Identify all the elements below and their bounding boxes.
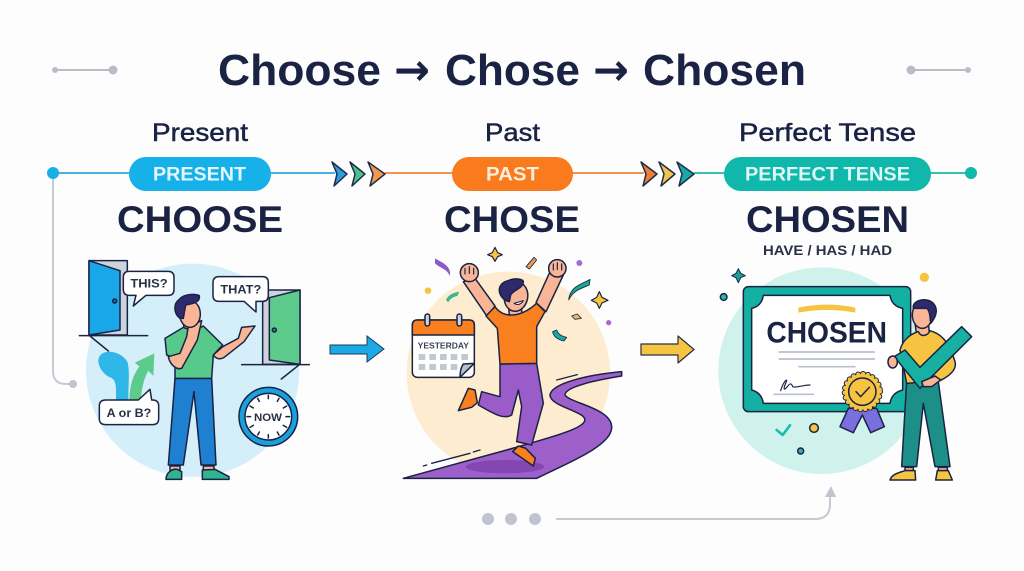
heading: Present: Present [152,119,248,147]
title [218,45,806,96]
panel: past illustration [403,247,622,478]
confetti and sparkles [425,247,611,341]
winding road [403,372,622,478]
callout: THIS?: THIS? [130,277,168,291]
timeline [47,167,977,179]
pill: PRESENT: PRESENT [153,164,246,186]
figure: thinking man [165,294,255,479]
background circle [86,264,299,477]
arrow: yellow [641,336,694,363]
icon: NOW clock [239,387,298,446]
figure: man with checkmark [888,300,972,480]
certificate: CHOSEN [766,317,887,350]
heading: Perfect Tense: Perfect Tense [739,119,916,147]
pill: PAST [452,157,573,191]
background circle [718,267,925,474]
connector: left elbow line [53,178,77,388]
background circle [407,272,610,475]
decoration: top right connector [906,66,971,74]
word: CHOSE: CHOSE [444,199,580,240]
decoration: top left connector [52,66,118,74]
panel: present illustration [79,261,309,479]
icon: right door [242,290,309,379]
connector: bottom dots and arrow [482,486,836,525]
icon: calendar YESTERDAY: YESTERDAY [418,340,469,350]
panel: perfect tense illustration [718,267,972,480]
pill: PERFECT TENSE: PERFECT TENSE [745,164,910,186]
pill: PAST: PAST [486,164,539,186]
icon: calendar YESTERDAY [412,314,474,377]
word: CHOOSE: CHOOSE [117,199,283,240]
certificate [743,287,911,412]
pill: PERFECT TENSE [724,157,931,191]
title: → [394,45,430,96]
title: Chose [445,46,580,95]
callout: THAT? [213,277,268,312]
title: → [593,45,629,96]
icon: award seal [840,374,884,433]
pill: PRESENT [129,157,271,191]
chevrons: past to perfect [641,162,694,186]
callout: A or B? [99,389,159,425]
callout: THIS? [123,271,174,306]
heading: Past: Past [485,119,540,147]
chevrons: present to past [332,162,385,186]
note: HAVE / HAS / HAD: HAVE / HAS / HAD [763,242,892,258]
figure: jumping man [458,260,566,466]
word: CHOSEN: CHOSEN [746,199,909,240]
sparkles and dots [720,269,929,454]
icon: NOW clock: NOW [254,412,282,424]
icon: split path arrows [98,352,154,400]
callout: THAT?: THAT? [220,282,261,296]
callout: A or B?: A or B? [107,406,151,420]
icon: left door [79,261,148,351]
title: Chosen [643,46,806,95]
title: Choose [218,46,381,95]
arrow: blue [330,336,384,362]
